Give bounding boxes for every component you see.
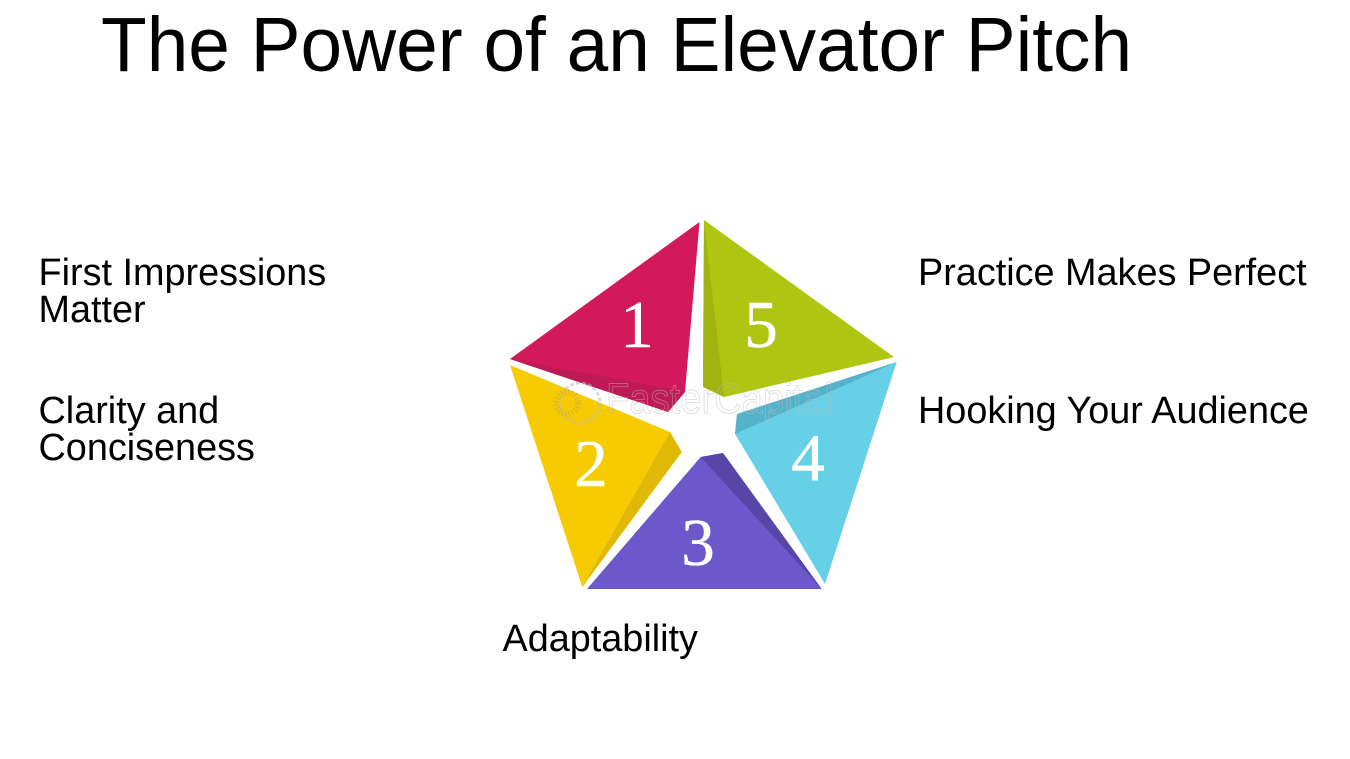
segment 3: purple: 3	[681, 506, 715, 580]
segment 2: yellow: 2	[574, 427, 608, 501]
segment 5: olive green: 5	[744, 288, 778, 362]
segment 1: crimson: 1	[620, 288, 654, 362]
label: Clarity and Conciseness: Clarity and	[38, 390, 219, 432]
segment 4: light blue: 4	[791, 421, 825, 495]
title: The Power of an Elevator Pitch	[101, 1, 1132, 87]
label: Practice Makes Perfect: Practice Makes Perfect	[918, 252, 1307, 294]
segment 3: purple	[587, 453, 822, 589]
segment 5: olive green	[703, 220, 894, 397]
label: Adaptability: Adaptability	[502, 618, 698, 660]
label: Clarity and Conciseness	[38, 390, 255, 469]
label: First Impressions Matter: First Impressions	[38, 252, 326, 294]
segment 2: yellow	[510, 365, 682, 587]
segment 1: crimson	[510, 222, 700, 412]
label: Hooking Your Audience: Hooking Your Audience	[918, 390, 1309, 432]
label: First Impressions Matter: Matter	[38, 289, 146, 331]
watermark: FasterCapital: FasterCapital	[606, 375, 833, 423]
label: Clarity and Conciseness: Conciseness	[38, 427, 255, 469]
label: First Impressions Matter	[38, 252, 326, 331]
segment 4: light blue	[735, 362, 897, 584]
